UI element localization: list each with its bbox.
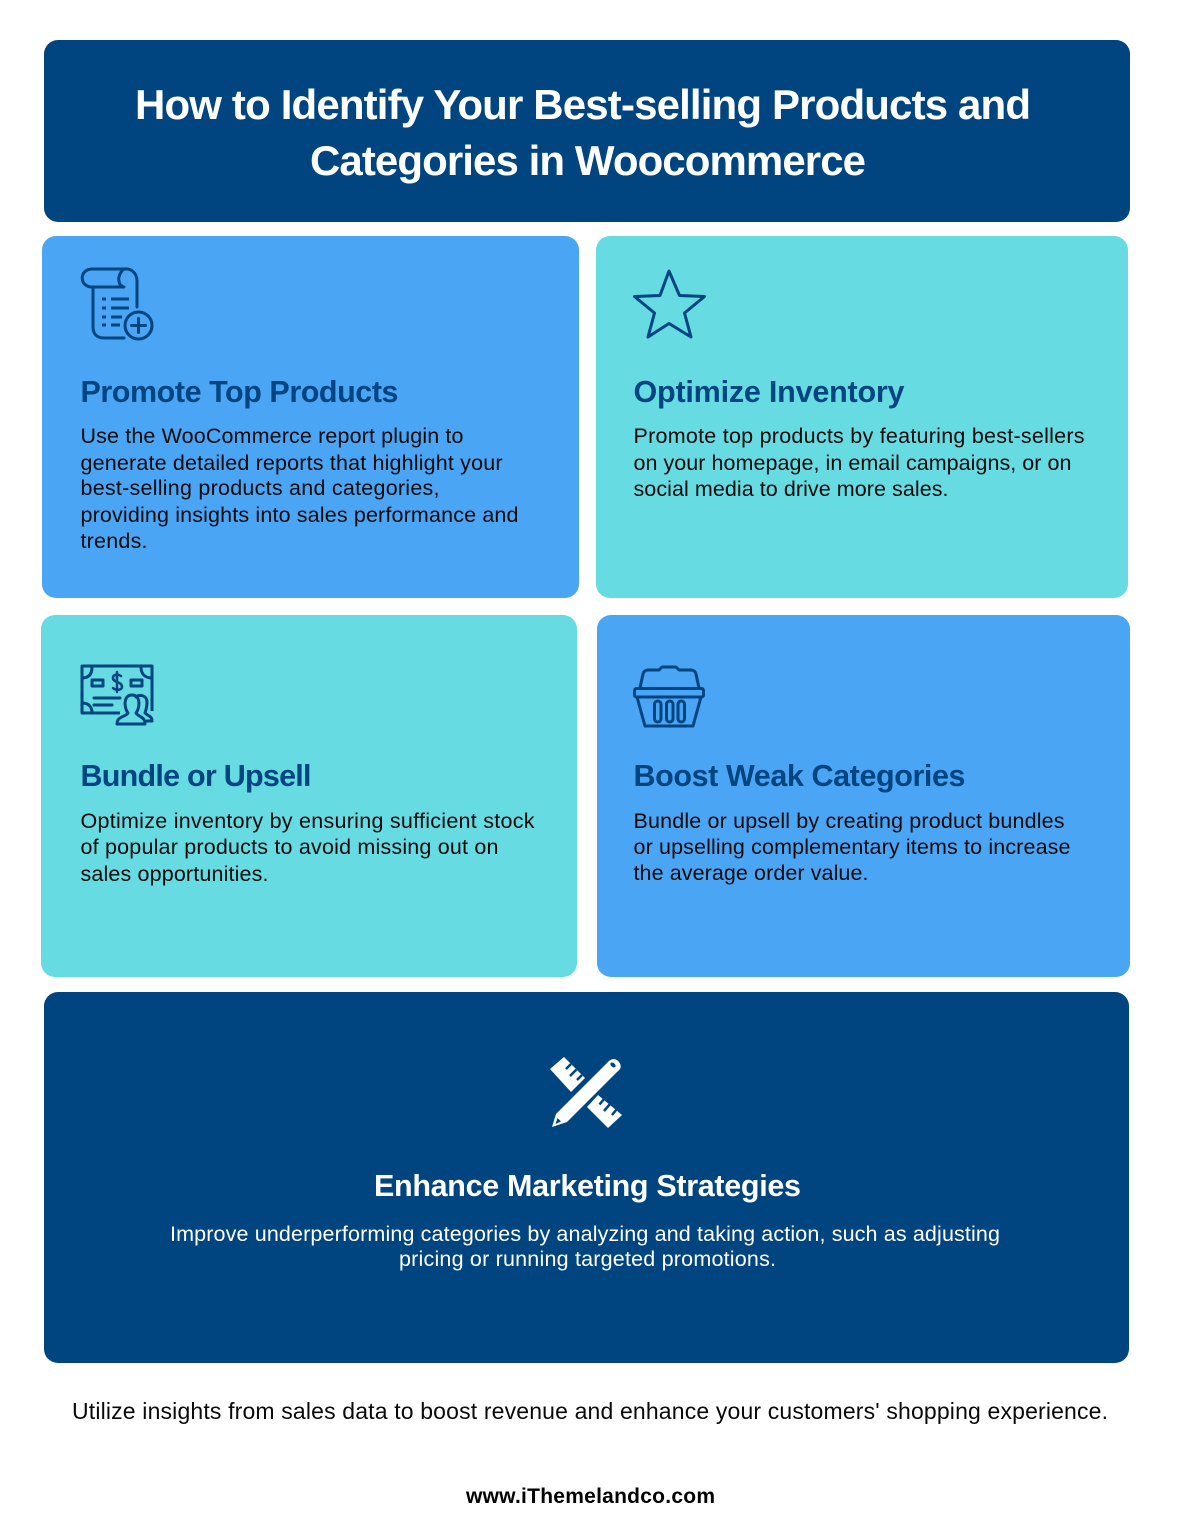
body text: generate detailed reports that highlight your xyxy=(80,451,502,475)
icon: certificate with people xyxy=(82,666,152,724)
panel: promote top products xyxy=(42,236,579,598)
body text: or upselling complementary items to increase xyxy=(634,835,1070,859)
closing statement: Utilize insights from sales data to boost revenue and enhance your customers' shopping experience. xyxy=(72,1398,1108,1424)
heading: Boost Weak Categories xyxy=(634,759,966,793)
body text xyxy=(80,809,535,886)
body text xyxy=(170,1222,1000,1271)
body text: of popular products to avoid missing out on xyxy=(80,835,498,859)
heading: Enhance Marketing Strategies xyxy=(374,1169,801,1203)
body text xyxy=(80,424,518,553)
body text: providing insights into sales performance and xyxy=(80,503,518,527)
title banner: How to Identify Your Best-selling Products and xyxy=(135,81,1031,128)
body text: Use the WooCommerce report plugin to xyxy=(80,424,464,448)
icon: star xyxy=(634,271,704,337)
body text: Improve underperforming categories by analyzing and taking action, such as adjusting xyxy=(170,1222,1000,1246)
title banner xyxy=(44,40,1130,222)
panel: boost weak categories xyxy=(597,615,1130,977)
icon: basket xyxy=(634,667,704,726)
body text: sales opportunities. xyxy=(80,862,268,886)
panel: enhance marketing strategies xyxy=(44,992,1129,1363)
website url: www.iThemelandco.com xyxy=(465,1485,715,1508)
icon: ruler and pencil xyxy=(550,1057,622,1128)
icon: report scroll with plus xyxy=(82,269,152,339)
body text: best-selling products and categories, xyxy=(80,476,440,500)
panel: optimize inventory xyxy=(596,236,1128,598)
body text: pricing or running targeted promotions. xyxy=(399,1247,776,1271)
body text: social media to drive more sales. xyxy=(634,477,948,501)
heading: Optimize Inventory xyxy=(634,375,905,409)
body text xyxy=(634,809,1070,885)
body text: the average order value. xyxy=(634,861,868,885)
body text: Bundle or upsell by creating product bundles xyxy=(634,809,1064,833)
panel: bundle or upsell xyxy=(41,615,577,977)
body text: Optimize inventory by ensuring sufficient stock xyxy=(80,809,535,833)
body text: on your homepage, in email campaigns, or on xyxy=(634,451,1072,475)
body text: Promote top products by featuring best-sellers xyxy=(634,424,1084,448)
body text: trends. xyxy=(80,529,148,553)
heading: Bundle or Upsell xyxy=(80,759,312,793)
title banner: Categories in Woocommerce xyxy=(310,137,866,184)
heading: Promote Top Products xyxy=(80,375,398,409)
body text xyxy=(634,424,1084,501)
